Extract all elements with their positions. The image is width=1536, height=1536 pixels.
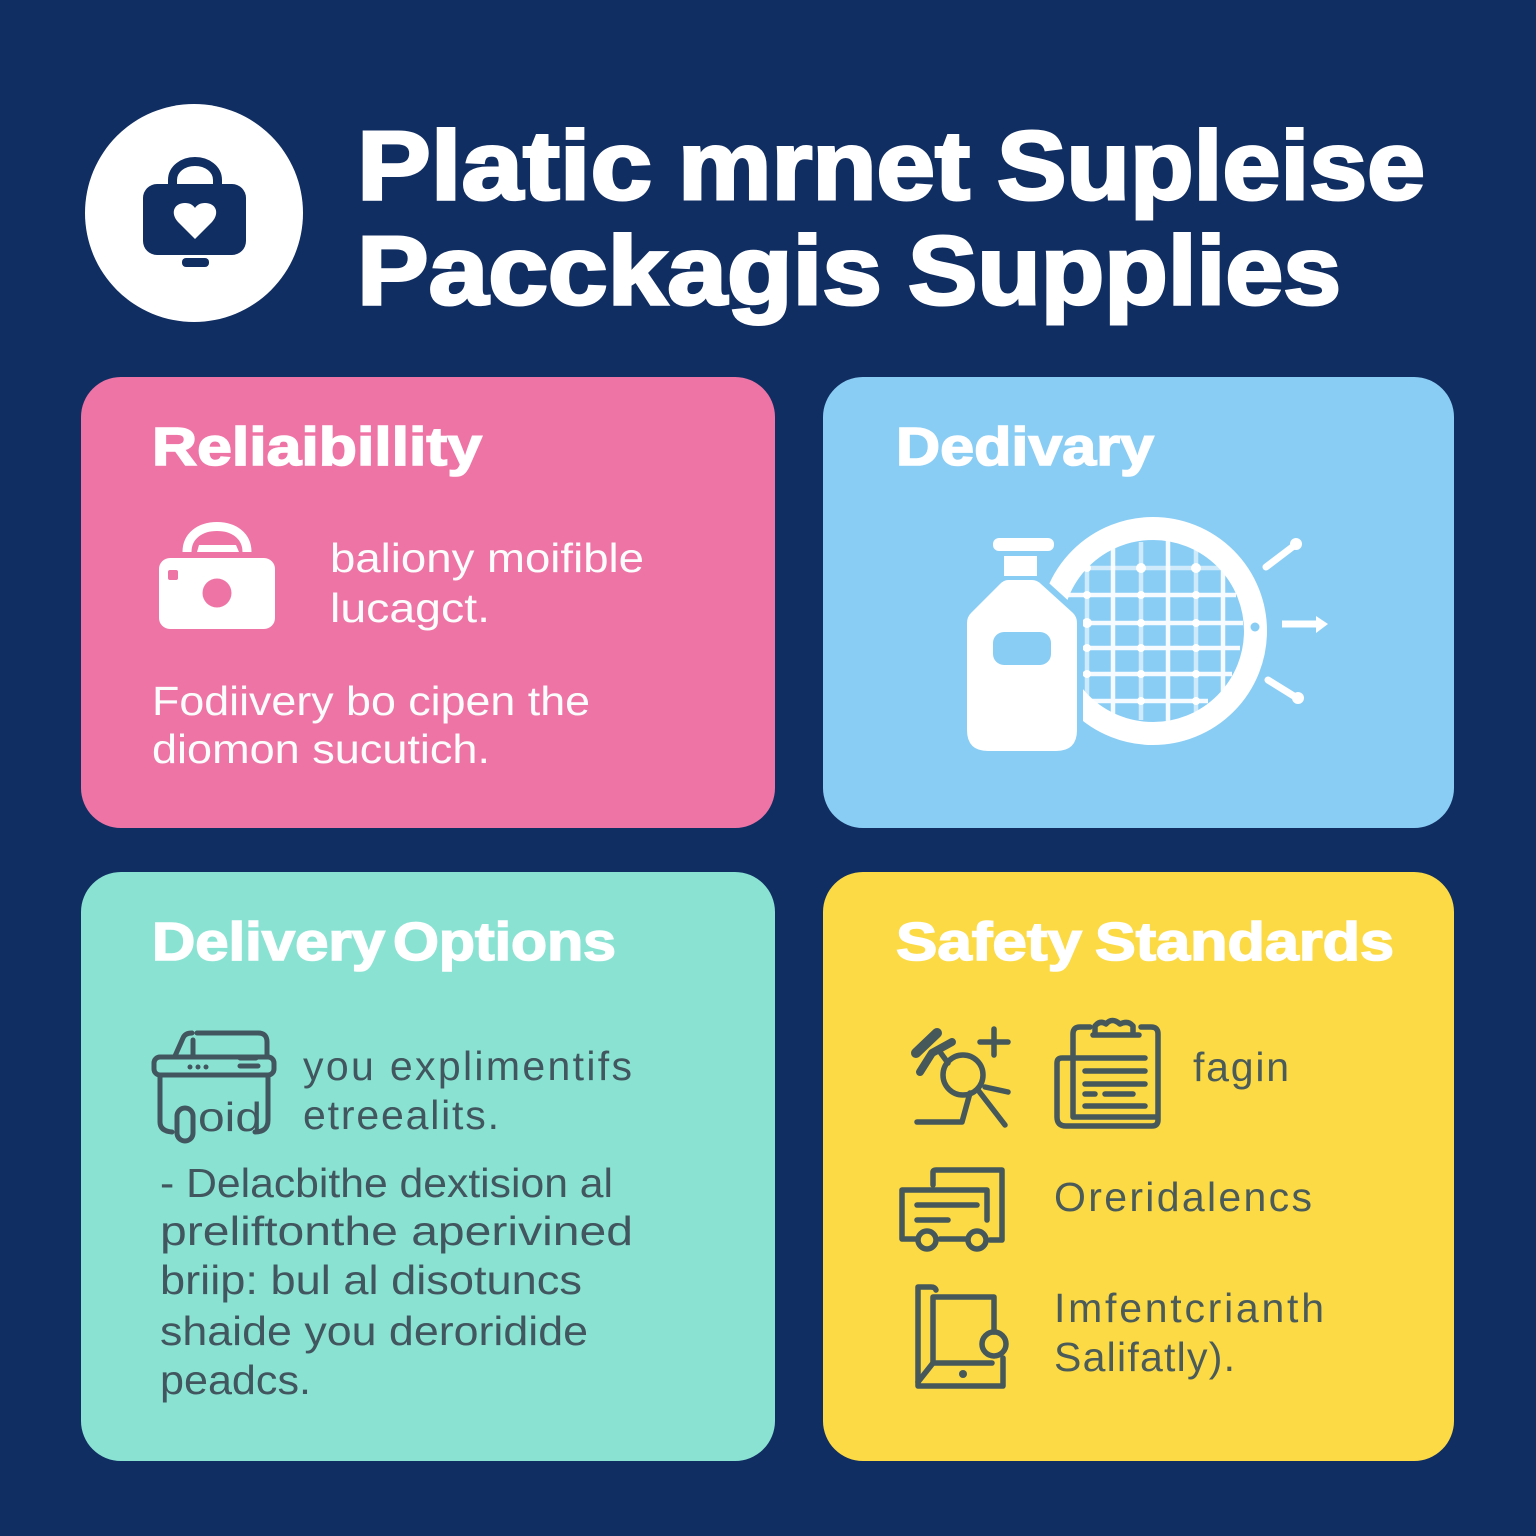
panel: reliability	[81, 377, 775, 828]
icon: delivery box: oid	[198, 1094, 262, 1140]
text: safety note: Imfentcrianth	[1054, 1285, 1324, 1331]
text: reliability short note: lucagct.	[330, 585, 490, 631]
text: delivery options description: - Delacbithe dextision al	[160, 1160, 613, 1206]
icon: clipboard	[1057, 1020, 1158, 1126]
text: reliability short note	[330, 535, 644, 631]
heading: safety standards: Safety	[896, 912, 1082, 972]
text: reliability short note: baliony moifible	[330, 535, 644, 581]
text: reliability description	[152, 678, 590, 772]
text: delivery options short note	[303, 1043, 632, 1138]
icon: bottle and mesh disc	[967, 528, 1328, 755]
icon: microscope	[916, 1029, 1008, 1125]
header icon: bag with heart in white circle	[85, 104, 303, 322]
text: delivery options description: shaide you deroridide	[160, 1308, 588, 1354]
heading: reliability: Reliaibillity	[152, 417, 482, 477]
text: delivery options description: briip: bul al disotuncs	[160, 1257, 582, 1303]
text: delivery options description: preliftonthe aperivined	[160, 1208, 633, 1254]
text: delivery options short note: you explimentifs	[303, 1043, 632, 1089]
title: mrnet	[678, 111, 970, 220]
text: oreridalencs: Oreridalencs	[1054, 1174, 1312, 1220]
title	[357, 111, 1425, 325]
text: delivery options description: peadcs.	[160, 1357, 311, 1403]
text: safety note	[1054, 1285, 1324, 1380]
panel: delivery options	[81, 872, 775, 1461]
icon: truck	[902, 1170, 1002, 1249]
heading: safety standards: Standards	[1095, 912, 1394, 972]
heading: delivery options: Options	[393, 912, 616, 972]
heading: safety standards	[896, 912, 1394, 972]
panel: safety standards	[823, 872, 1454, 1461]
title: Supleise	[997, 111, 1425, 220]
text: reliability description: Fodiivery bo cipen the	[152, 678, 590, 724]
panel: delivery	[823, 377, 1454, 828]
title: Supplies	[908, 216, 1341, 325]
text: delivery options description	[160, 1160, 633, 1403]
heading: delivery options	[152, 912, 616, 972]
icon: tablet book	[918, 1287, 1006, 1386]
icon: delivery box	[154, 1033, 274, 1141]
title: Pacckagis	[357, 216, 882, 325]
icon: camera bag	[159, 526, 275, 629]
heading: delivery options: Delivery	[152, 912, 385, 972]
text: reliability description: diomon sucutich.	[152, 726, 490, 772]
text: safety note: Salifatly).	[1054, 1334, 1235, 1380]
text: delivery options short note: etreealits.	[303, 1092, 499, 1138]
title: Platic	[357, 111, 652, 220]
heading: delivery: Dedivary	[896, 417, 1154, 477]
text: fagin: fagin	[1193, 1044, 1289, 1090]
